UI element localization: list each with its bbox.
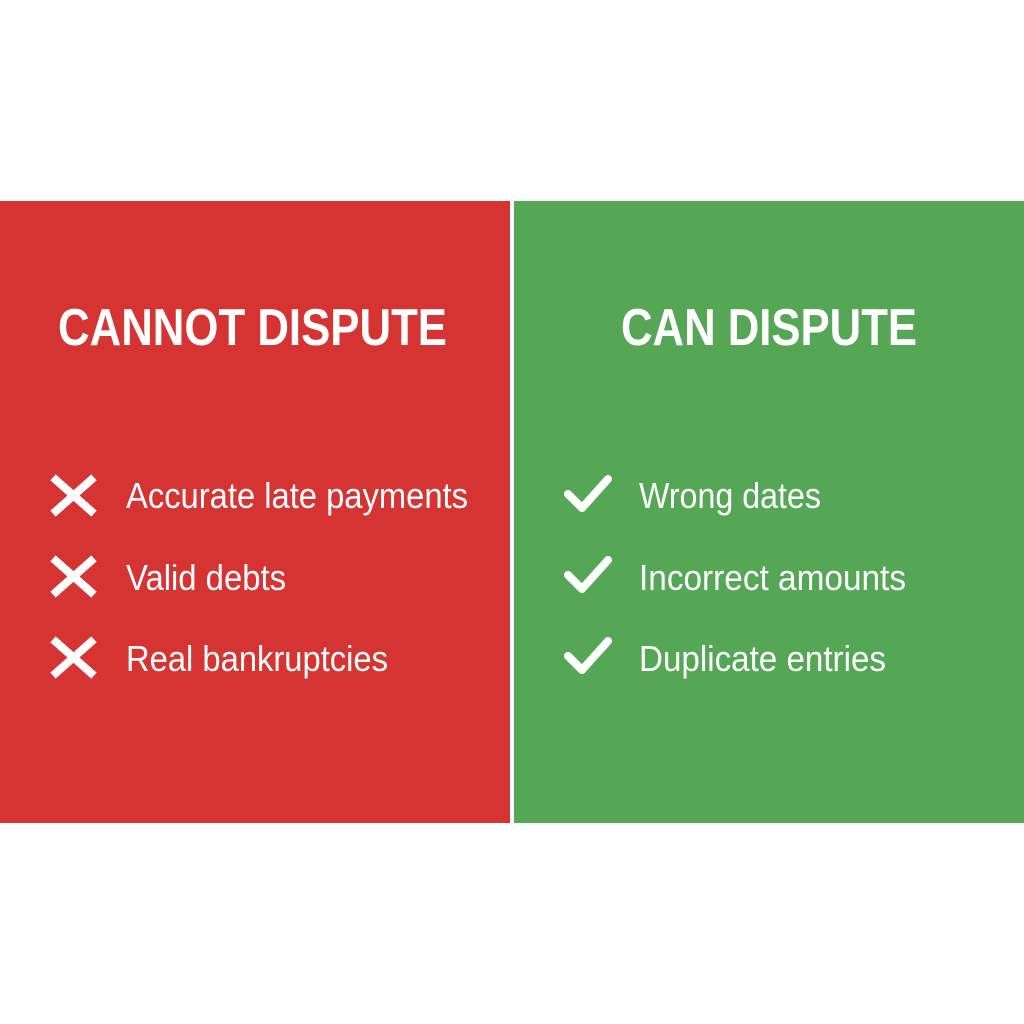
item: duplicate entries: Duplicate entries [639, 638, 886, 679]
heading: cannot dispute: CANNOT DISPUTE [58, 299, 447, 357]
item: accurate late payments: Accurate late payments [126, 475, 468, 516]
panel: cannot dispute [0, 201, 510, 823]
item: real bankruptcies: Real bankruptcies [126, 638, 388, 679]
item: incorrect amounts: Incorrect amounts [639, 557, 906, 598]
heading: can dispute: CAN DISPUTE [621, 299, 917, 357]
item: wrong dates: Wrong dates [639, 475, 821, 516]
item: valid debts: Valid debts [126, 557, 286, 598]
panel: can dispute [514, 201, 1024, 823]
item: valid debts [56, 557, 286, 598]
item: wrong dates [568, 475, 821, 516]
